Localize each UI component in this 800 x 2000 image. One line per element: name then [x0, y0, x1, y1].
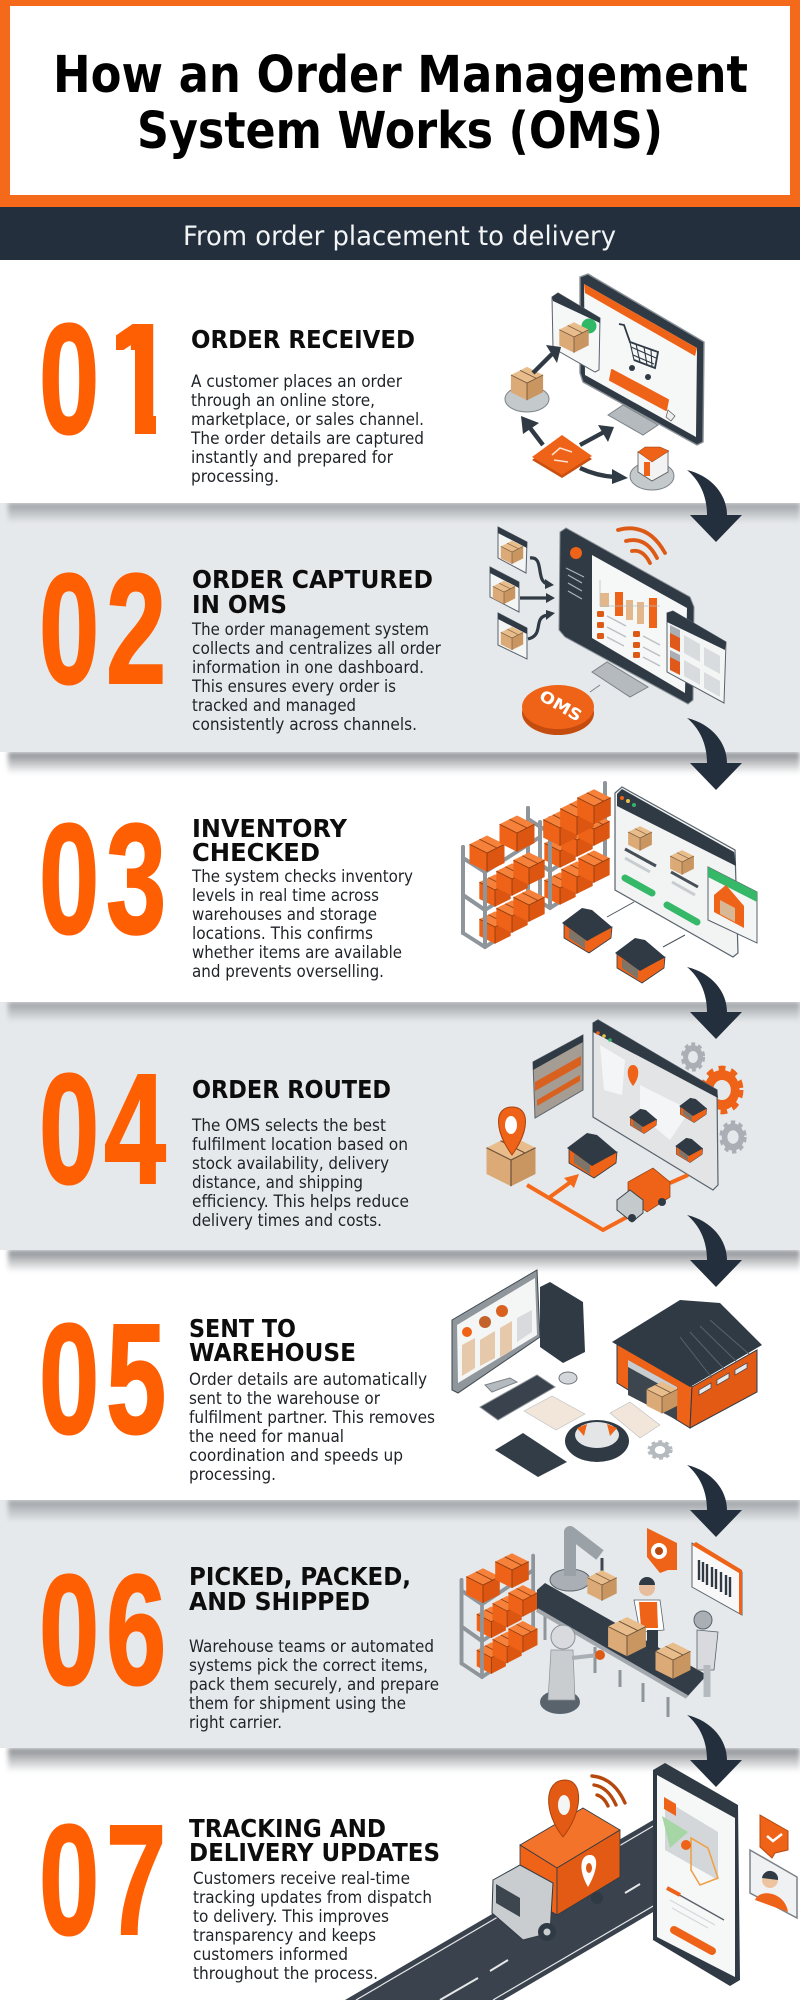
OMS disc: OMS [536, 686, 585, 725]
body text: picked packed shipped: Warehouse teams or automated [189, 1637, 434, 1656]
location pin [549, 1780, 579, 1837]
number 05: 5 [106, 1291, 166, 1467]
check badge [760, 1815, 788, 1858]
truck cargo box [520, 1808, 620, 1915]
heading: order routed: ORDER ROUTED [192, 1075, 391, 1104]
illustration: OMS dashboard [490, 527, 726, 735]
body text: order received: through an online store, [191, 391, 375, 410]
body text: order received: A customer places an order [191, 372, 402, 391]
panel: step 4 [0, 991, 800, 1272]
number 02: 2 [106, 541, 166, 717]
body text: inventory checked: whether items are available [192, 943, 402, 962]
parcel with location pin [486, 1107, 536, 1186]
number 01 [42, 322, 156, 436]
body text: tracking and delivery: Customers receive real-time [193, 1869, 410, 1888]
card arrows [520, 558, 555, 639]
heading: order captured [192, 565, 433, 619]
number 01: 1 [97, 292, 180, 467]
heading: order captured: IN OMS [192, 590, 287, 619]
warehouse building [612, 1300, 762, 1428]
warehouse [567, 1133, 617, 1178]
heading: tracking and delivery: DELIVERY UPDATES [189, 1838, 440, 1867]
body text: order received: instantly and prepared for [191, 448, 393, 467]
packed boxes [608, 1617, 690, 1679]
heading: tracking and delivery: TRACKING AND [189, 1814, 386, 1843]
pc tower [540, 1282, 585, 1363]
wifi signal [618, 528, 665, 563]
grey band [0, 492, 800, 774]
inventory screen [615, 787, 738, 957]
body text: order routed: The OMS selects the best [191, 1116, 386, 1135]
body text: order routed: distance, and shipping [192, 1173, 363, 1192]
heading: order captured: ORDER CAPTURED [192, 565, 433, 594]
orange hub tile [532, 435, 592, 478]
body text: order received: The order details are captured [190, 429, 424, 448]
truck cab [492, 1865, 556, 1941]
body text: picked packed shipped [189, 1637, 439, 1732]
storage racks [463, 783, 611, 947]
body text: tracking and delivery [193, 1869, 432, 1983]
flow arrows [521, 345, 628, 484]
number 06 [39, 1542, 166, 1718]
arrow: step 6 to 7 [687, 1715, 742, 1787]
monitor [580, 274, 704, 445]
heading: picked packed shipped: AND SHIPPED [189, 1587, 370, 1616]
body text: order received [190, 372, 424, 486]
heading: picked packed shipped: PICKED, PACKED, [189, 1562, 411, 1591]
body text: sent to warehouse: sent to the warehouse or [189, 1389, 380, 1408]
heading: sent to warehouse: SENT TO [189, 1314, 296, 1343]
number 03: 0 [39, 791, 99, 967]
body text: picked packed shipped: them for shipment using the [189, 1694, 406, 1713]
panel: step 5 [39, 1270, 762, 1484]
number 02 [39, 541, 166, 717]
number 07: 7 [106, 1792, 166, 1968]
smartphone [653, 1763, 740, 1986]
body text: order routed: fulfilment location based on [192, 1135, 408, 1154]
order cards [490, 527, 527, 659]
body text: order captured: collects and centralizes all order [192, 639, 441, 658]
body text: order captured: tracked and managed [192, 696, 356, 715]
map window [593, 1020, 718, 1190]
body text: sent to warehouse: the need for manual [189, 1427, 344, 1446]
illustration: picking and packing [462, 1528, 742, 1717]
number 07: 0 [39, 1792, 99, 1968]
secondary window [667, 611, 726, 703]
worker [634, 1577, 664, 1650]
body text: inventory checked: The system checks inventory [191, 867, 413, 886]
gears [682, 1044, 745, 1151]
dark card [495, 1433, 567, 1477]
route lines [527, 1174, 688, 1230]
number 05: 0 [39, 1291, 99, 1467]
number 02: 0 [39, 541, 99, 717]
road [345, 1816, 660, 2000]
number 03 [39, 791, 166, 967]
title: System Works (OMS) [137, 102, 663, 161]
body text: tracking and delivery: customers informed [193, 1945, 348, 1964]
delivery truck [617, 1168, 670, 1222]
body text: sent to warehouse: Order details are automatically [189, 1370, 427, 1389]
number 01: 0 [39, 291, 99, 467]
body text: inventory checked: levels in real time across [192, 886, 379, 905]
body text: tracking and delivery: to delivery. This improves [193, 1907, 389, 1926]
body text: picked packed shipped: right carrier. [189, 1713, 282, 1732]
panel: step 3 [39, 783, 757, 983]
arrow: step 5 to 6 [687, 1465, 742, 1537]
warehouses [562, 908, 665, 983]
panel: step 7 [39, 1763, 797, 2000]
heading: order received: ORDER RECEIVED [191, 325, 415, 354]
panel: step 6 [0, 1489, 800, 1772]
warehouse status card [708, 867, 757, 943]
desktop monitor [452, 1270, 540, 1393]
body text: sent to warehouse [189, 1370, 435, 1484]
body text: inventory checked: warehouses and storage [192, 905, 377, 924]
heading: picked packed shipped [189, 1562, 411, 1616]
body text: tracking and delivery: transparency and keeps [193, 1926, 376, 1945]
keyboard and mouse [480, 1372, 577, 1420]
body text: order captured: consistently across channels. [192, 715, 417, 734]
body text: order routed [191, 1116, 409, 1230]
number 07 [39, 1792, 166, 1968]
body text: inventory checked: locations. This confirms [192, 924, 373, 943]
body text: inventory checked: and prevents overselling. [192, 962, 384, 981]
body text: picked packed shipped: pack them securely, and prepare [189, 1675, 439, 1694]
grey band [0, 991, 800, 1272]
body text: sent to warehouse: coordination and speeds up [189, 1446, 403, 1465]
arrow: step 1 to 2 [687, 470, 742, 542]
small order window [552, 293, 600, 372]
illustration: sent to warehouse [452, 1270, 762, 1477]
number 04: 0 [39, 1041, 99, 1217]
subtitle band [0, 207, 800, 260]
body text: order routed: delivery times and costs. [192, 1211, 382, 1230]
data panel [533, 1035, 583, 1118]
number 04: 4 [104, 1041, 166, 1216]
conveyor belt [537, 1583, 707, 1717]
arrow: step 4 to 5 [687, 1215, 742, 1287]
box on platform [505, 367, 549, 412]
illustration: inventory check [463, 783, 757, 983]
body text: order captured: This ensures every order is [191, 677, 396, 696]
body text: inventory checked [191, 867, 413, 981]
panel: step 2 [0, 492, 800, 774]
subtitle band: From order placement to delivery [183, 221, 616, 252]
heading: tracking and delivery [189, 1814, 440, 1867]
number 03: 3 [106, 791, 166, 967]
number 04 [39, 1041, 166, 1217]
body text: tracking and delivery: tracking updates from dispatch [193, 1888, 432, 1907]
right robot [694, 1611, 718, 1697]
rack with boxes [462, 1553, 538, 1677]
connectors [607, 902, 685, 947]
arrow: step 3 to 4 [687, 967, 742, 1039]
body text: picked packed shipped: systems pick the correct items, [189, 1656, 428, 1675]
heading: inventory checked: CHECKED [192, 838, 320, 867]
customer card [750, 1850, 797, 1918]
illustration: tracking and delivery [345, 1763, 797, 2000]
monitor stand [592, 662, 648, 697]
body text: sent to warehouse: processing. [189, 1465, 276, 1484]
left robot [540, 1625, 605, 1714]
dashboard monitor [559, 528, 694, 704]
handshake disc [565, 1420, 629, 1462]
body text: order received: marketplace, or sales channel. [191, 410, 424, 429]
arrow: step 2 to 3 [687, 718, 742, 790]
body text: sent to warehouse: fulfilment partner. This removes [189, 1408, 435, 1427]
robot arm [550, 1532, 617, 1601]
OMS disc [522, 685, 600, 735]
body text: order routed: stock availability, delivery [192, 1154, 389, 1173]
heading: sent to warehouse: WAREHOUSE [189, 1338, 356, 1367]
barcode card [692, 1542, 742, 1615]
wifi signal [592, 1776, 625, 1806]
heading: inventory checked [192, 814, 348, 867]
body text: order captured: The order management system [191, 620, 429, 639]
number 05 [39, 1291, 166, 1467]
body text: order received: processing. [191, 467, 279, 486]
illustration: online order monitor [505, 274, 704, 490]
header panel [0, 0, 800, 207]
body text: tracking and delivery: throughout the process. [193, 1964, 378, 1983]
body text: order captured: information in one dashboard. [192, 658, 424, 677]
body text: order captured [191, 620, 441, 734]
store on platform [630, 447, 674, 490]
title [53, 46, 748, 161]
heading: inventory checked: INVENTORY [192, 814, 348, 843]
order documents [524, 1396, 660, 1438]
number 06: 6 [106, 1542, 166, 1718]
grey band [0, 1489, 800, 1772]
body text: order routed: efficiency. This helps reduce [192, 1192, 409, 1211]
scan tag [647, 1528, 677, 1573]
heading: sent to warehouse [189, 1314, 356, 1367]
illustration: order routing [486, 1020, 745, 1230]
small gear [649, 1442, 671, 1458]
panel: step 1 [39, 274, 704, 490]
number 06: 0 [39, 1542, 99, 1718]
